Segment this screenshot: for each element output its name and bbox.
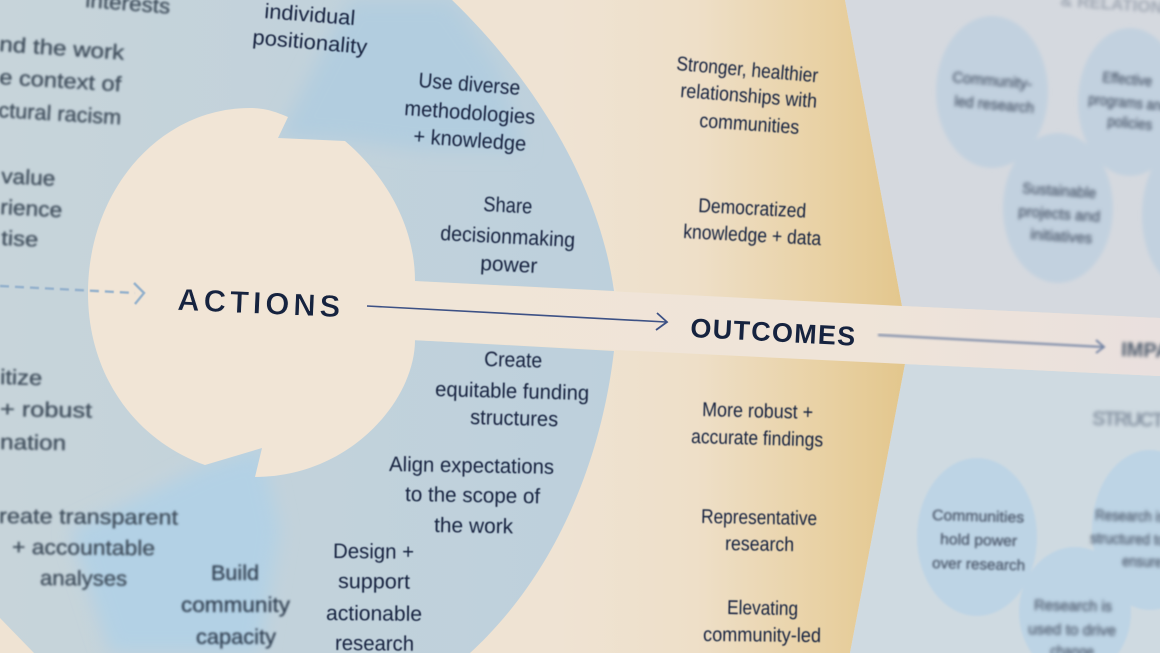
text: actions sharp, lower ring: Align expectations xyxy=(389,453,554,479)
text: actions sharp, lower ring: Design + xyxy=(333,540,414,564)
text: outcomes bottom: More robust + xyxy=(702,399,813,424)
actions circle xyxy=(88,108,415,477)
text: actions sharp, upper ring: positionality xyxy=(252,26,369,59)
text: actions, blurred left column xyxy=(0,0,178,591)
text: impact circles top (blurred): policies xyxy=(1107,113,1153,134)
impact circles top xyxy=(936,16,1160,285)
text: impact circles bottom (blurred): Communities xyxy=(932,507,1024,526)
text: impact circles top (blurred): projects and xyxy=(1018,203,1101,226)
text: actions, slightly blurred bottom: community xyxy=(181,594,291,617)
text: actions sharp, upper ring: individual xyxy=(264,0,356,30)
text: actions sharp, upper ring: Use diverse xyxy=(418,69,521,100)
text: actions, blurred left column: nation xyxy=(0,431,66,455)
panel: impact top section xyxy=(845,0,1160,318)
arrow: actions to outcomes xyxy=(367,306,667,330)
text: actions sharp, lower ring: actionable xyxy=(326,602,422,626)
text: outcomes top: Stronger, healthier xyxy=(676,53,819,87)
text: actions sharp, lower ring: to the scope of xyxy=(405,483,540,508)
text: actions, blurred left column: value xyxy=(1,165,56,191)
text: actions sharp, lower ring: the work xyxy=(434,514,514,538)
text: actions, blurred left column: tise xyxy=(1,227,39,252)
text: impact circles top (blurred): Community- xyxy=(952,69,1033,93)
text: actions, slightly blurred bottom xyxy=(181,562,291,649)
text: impact circles bottom right (blurred): Research is xyxy=(1034,597,1112,615)
text: outcomes top: knowledge + data xyxy=(683,221,822,250)
text: impact circles bottom right (blurred): used to drive xyxy=(1028,621,1116,640)
impact circles bottom xyxy=(917,450,1160,653)
text: actions sharp, upper ring: power xyxy=(480,252,538,278)
text: actions sharp, lower ring: Create xyxy=(484,348,542,373)
panel: outcomes gold gradient xyxy=(470,0,905,653)
dashed arrow into actions xyxy=(0,283,144,304)
text: outcomes top: relationships with xyxy=(680,80,818,113)
text: impact circles top (blurred): Effective xyxy=(1102,69,1153,90)
text: outcomes bottom: accurate findings xyxy=(691,426,823,451)
heading: actions: ACTIONS xyxy=(177,282,341,324)
text: impact circles bottom right (blurred) xyxy=(1028,507,1160,653)
text: impact circles top (blurred): led research xyxy=(954,93,1035,117)
text: impact circles bottom (blurred) xyxy=(932,507,1025,574)
text: outcomes bottom: community-led xyxy=(703,624,821,647)
panel: blue ring around actions xyxy=(0,0,614,653)
text: outcomes top: communities xyxy=(699,110,800,139)
text: impact circles bottom (blurred): over research xyxy=(932,555,1025,574)
heading: outcomes: OUTCOMES xyxy=(690,313,856,352)
horizontal band xyxy=(410,281,1160,376)
text: actions sharp, upper ring: decisionmaking xyxy=(440,222,576,252)
text: actions sharp, lower ring: support xyxy=(338,570,410,594)
text: actions sharp, lower ring: equitable funding xyxy=(435,378,589,405)
text: outcomes bottom: research xyxy=(725,533,794,556)
text: actions, slightly blurred bottom: capacity xyxy=(196,626,277,649)
text: actions, blurred left column: ctural racism xyxy=(0,99,122,129)
text: outcomes top: Democratized xyxy=(698,195,807,223)
text: outcomes bottom xyxy=(691,399,823,647)
panel: impact bottom section xyxy=(850,364,1160,653)
text: actions, blurred left column: e context of xyxy=(0,66,122,96)
text: actions, blurred left column: nd the work xyxy=(0,33,126,65)
text: impact circles top (blurred): Sustainable xyxy=(1022,180,1097,202)
text: impact circles top (blurred): initiatives xyxy=(1030,226,1093,247)
text: outcomes bottom: Elevating xyxy=(727,597,798,620)
text: outcomes top xyxy=(676,53,822,250)
text: actions, blurred left column: analyses xyxy=(40,567,127,591)
arrow: bottom cycle arrow xyxy=(70,448,280,653)
text: actions, blurred left column: + accountable xyxy=(12,536,155,560)
text: actions, blurred left column: reate transparent xyxy=(0,505,178,530)
text: actions sharp, upper ring xyxy=(252,0,576,278)
bottom-left cream corner xyxy=(0,618,34,653)
text: actions, blurred left column: itize xyxy=(0,366,42,390)
text: impact circles bottom (blurred): hold power xyxy=(940,531,1017,550)
arrow: outcomes to impact xyxy=(878,335,1104,353)
text: actions sharp, lower ring: structures xyxy=(470,406,558,431)
text: actions sharp, upper ring: methodologies xyxy=(404,97,536,129)
text: actions, blurred left column: rience xyxy=(0,196,63,222)
text: outcomes bottom: Representative xyxy=(701,506,817,530)
text: impact circles top (blurred) xyxy=(952,69,1160,247)
text: actions, blurred left column: + robust xyxy=(0,398,92,423)
text: actions, slightly blurred bottom: Build xyxy=(211,562,259,585)
arrow: top cycle arrow xyxy=(278,0,525,150)
text: actions sharp, upper ring: + knowledge xyxy=(413,125,527,156)
text: actions sharp, upper ring: Share xyxy=(483,193,533,219)
text: actions sharp, lower ring xyxy=(326,348,589,653)
